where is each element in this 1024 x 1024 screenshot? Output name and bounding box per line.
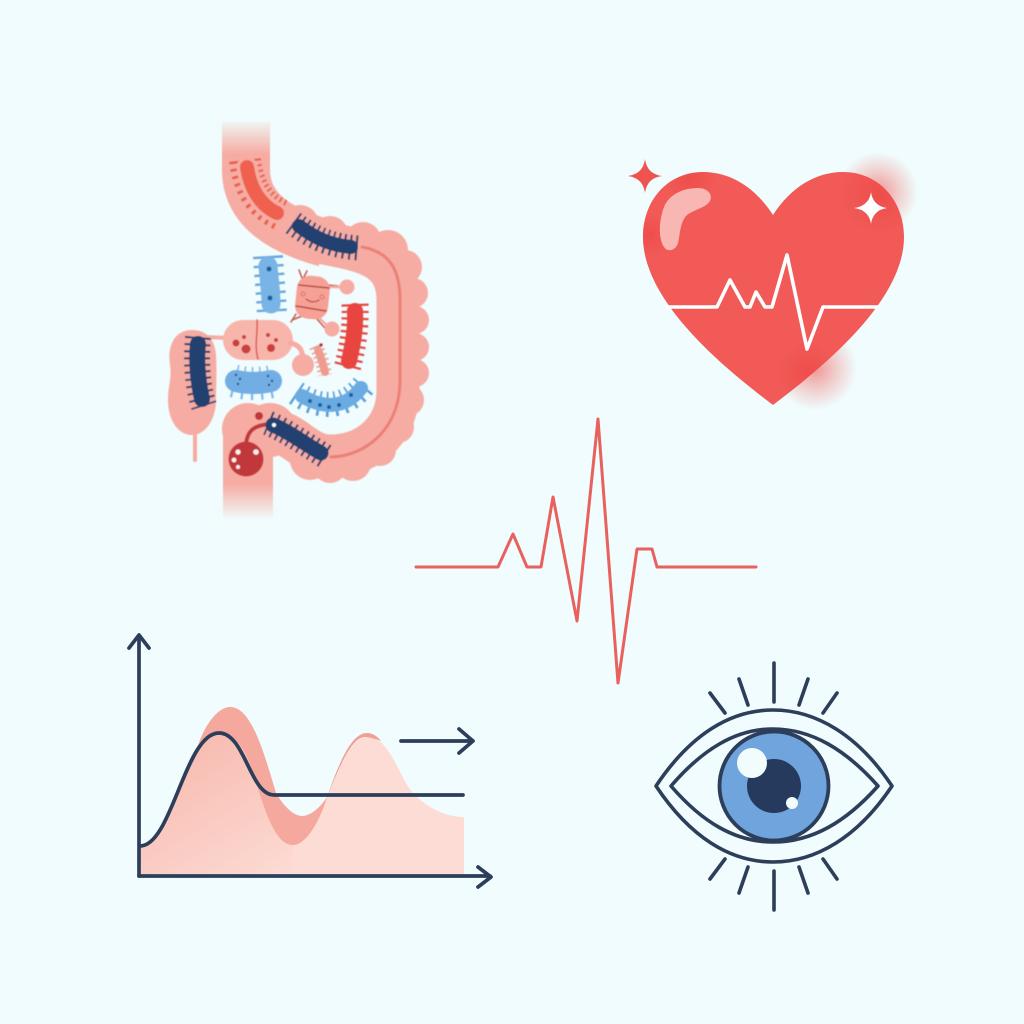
heart pulse line [667,255,879,349]
axis arrow: x [139,867,491,887]
heart highlight [660,188,711,250]
center pulse line [416,419,756,683]
bacterium: blue pill [234,374,274,386]
panel: line and area chart [129,635,491,887]
bacterium: red rod [347,304,355,369]
second peak band [327,733,381,797]
eye highlight large [737,748,767,778]
bacterium: upper navy [293,223,358,248]
bacterium: small pink [316,343,325,375]
inner eyelid [671,729,878,842]
darker salmon band [198,707,327,845]
eye highlight small [786,797,798,809]
bacterium: lower navy [268,423,328,458]
cecum lobes [223,320,314,376]
chart curve [140,733,463,846]
iris [720,732,828,840]
heart shape [643,172,904,405]
heart shading [643,172,898,386]
sparkle: white [854,192,887,224]
infographic canvas [127,122,914,912]
bacterium: blue curved [296,381,367,409]
colon [215,118,429,520]
pale area [140,707,464,874]
panel: eye [656,663,892,910]
smiling salmon microbe [291,270,354,336]
eyelash rays [710,663,837,910]
heart glow top right [838,152,918,232]
bacterium: upper red [245,160,283,216]
trend arrow [401,729,473,753]
heart glow bottom [773,326,857,410]
appendix pouch [168,330,228,460]
dark red cyst with stem [228,412,270,476]
bacterium: blue rod [266,256,272,316]
outer eyelid [656,710,892,862]
panel: heart [628,152,920,410]
pale area left shading [140,733,293,874]
bacterium: navy in appendix [197,337,204,406]
axis arrow: y [129,635,149,876]
panel: gut with bacteria [168,118,429,520]
sparkle: red [628,159,662,193]
pupil [747,759,801,813]
